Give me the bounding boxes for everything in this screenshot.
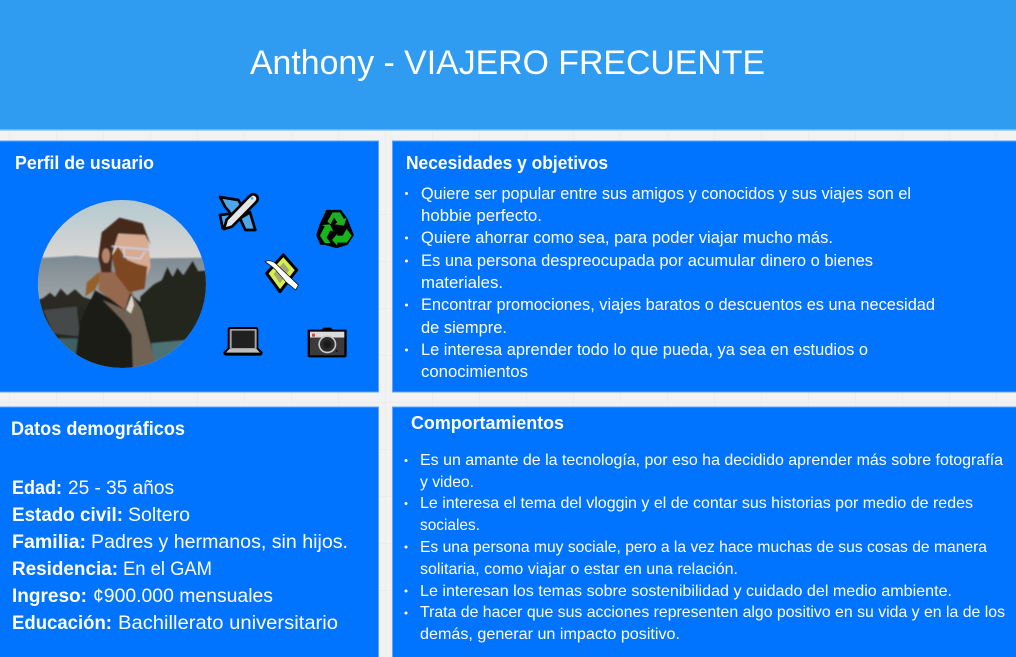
demographic data list: 25 - 35 años <box>68 477 174 499</box>
icon: money with wings <box>265 255 298 292</box>
list: comportamientos: y video. <box>420 474 474 491</box>
list: comportamientos: Trata de hacer que sus acciones representen algo positivo en su vida y en la de los <box>420 604 1005 621</box>
demographic data list: Soltero <box>128 504 190 526</box>
list: necesidades: Quiere ahorrar como sea, para poder viajar mucho más. <box>421 229 833 247</box>
demographic data list: Residencia: <box>12 558 118 580</box>
demographic data list: Ingreso: <box>12 585 87 607</box>
list: comportamientos: solitaria, como viajar o estar en una relación. <box>420 561 738 578</box>
demographic data list: En el GAM <box>123 558 212 580</box>
demographic data list: Educación: <box>12 612 112 634</box>
list: comportamientos: demás, generar un impacto positivo. <box>420 626 680 643</box>
demographic data list: ¢900.000 mensuales <box>93 585 273 607</box>
demographic data list: Bachillerato universitario <box>118 612 338 634</box>
list: necesidades: Quiere ser popular entre sus amigos y conocidos y sus viajes son el <box>421 185 911 203</box>
list: comportamientos <box>404 452 1005 643</box>
demographic data list: Padres y hermanos, sin hijos. <box>91 531 348 553</box>
portrait photo <box>38 200 206 368</box>
list: necesidades: de siempre. <box>421 319 507 337</box>
list: necesidades <box>405 185 935 381</box>
list: necesidades: conocimientos <box>421 363 528 381</box>
list: comportamientos: Es una persona muy sociale, pero a la vez hace muchas de sus cosas de manera <box>420 539 987 556</box>
list: necesidades: hobbie perfecto. <box>421 207 542 225</box>
title: Anthony - VIAJERO FRECUENTE <box>250 44 765 82</box>
heading: comportamientos: Comportamientos <box>411 413 564 433</box>
panel: necesidades y objetivos <box>392 141 1016 392</box>
list: necesidades: Encontrar promociones, viajes baratos o descuentos es una necesidad <box>421 296 935 314</box>
demographic data list: Edad: <box>12 477 62 499</box>
list: necesidades: materiales. <box>421 274 503 292</box>
icon: airplane <box>220 194 258 230</box>
icon: camera <box>308 328 347 357</box>
panel: datos demográficos <box>0 407 378 657</box>
panel: comportamientos <box>392 407 1016 657</box>
icon: laptop <box>224 328 262 355</box>
list: necesidades: Le interesa aprender todo lo que pueda, ya sea en estudios o <box>421 341 868 359</box>
list: comportamientos: Es un amante de la tecnología, por eso ha decidido aprender más sobre fotografía <box>420 452 1003 469</box>
demographic data list: Estado civil: <box>12 504 123 526</box>
icon: recycling <box>317 210 353 248</box>
heading: perfil de usuario: Perfil de usuario <box>15 153 154 173</box>
demographic data list <box>12 477 348 634</box>
list: necesidades: Es una persona despreocupada por acumular dinero o bienes <box>421 252 873 270</box>
heading: datos demográficos: Datos demográficos <box>11 419 185 440</box>
panel: perfil de usuario <box>0 141 378 392</box>
heading: necesidades y objetivos: Necesidades y objetivos <box>406 153 608 173</box>
demographic data list: Familia: <box>12 531 86 553</box>
title banner <box>0 0 1016 131</box>
list: comportamientos: Le interesan los temas sobre sostenibilidad y cuidado del medio ambiente. <box>420 583 952 600</box>
list: comportamientos: sociales. <box>420 517 480 534</box>
list: comportamientos: Le interesa el tema del vloggin y el de contar sus historias por medio de redes <box>420 495 973 512</box>
